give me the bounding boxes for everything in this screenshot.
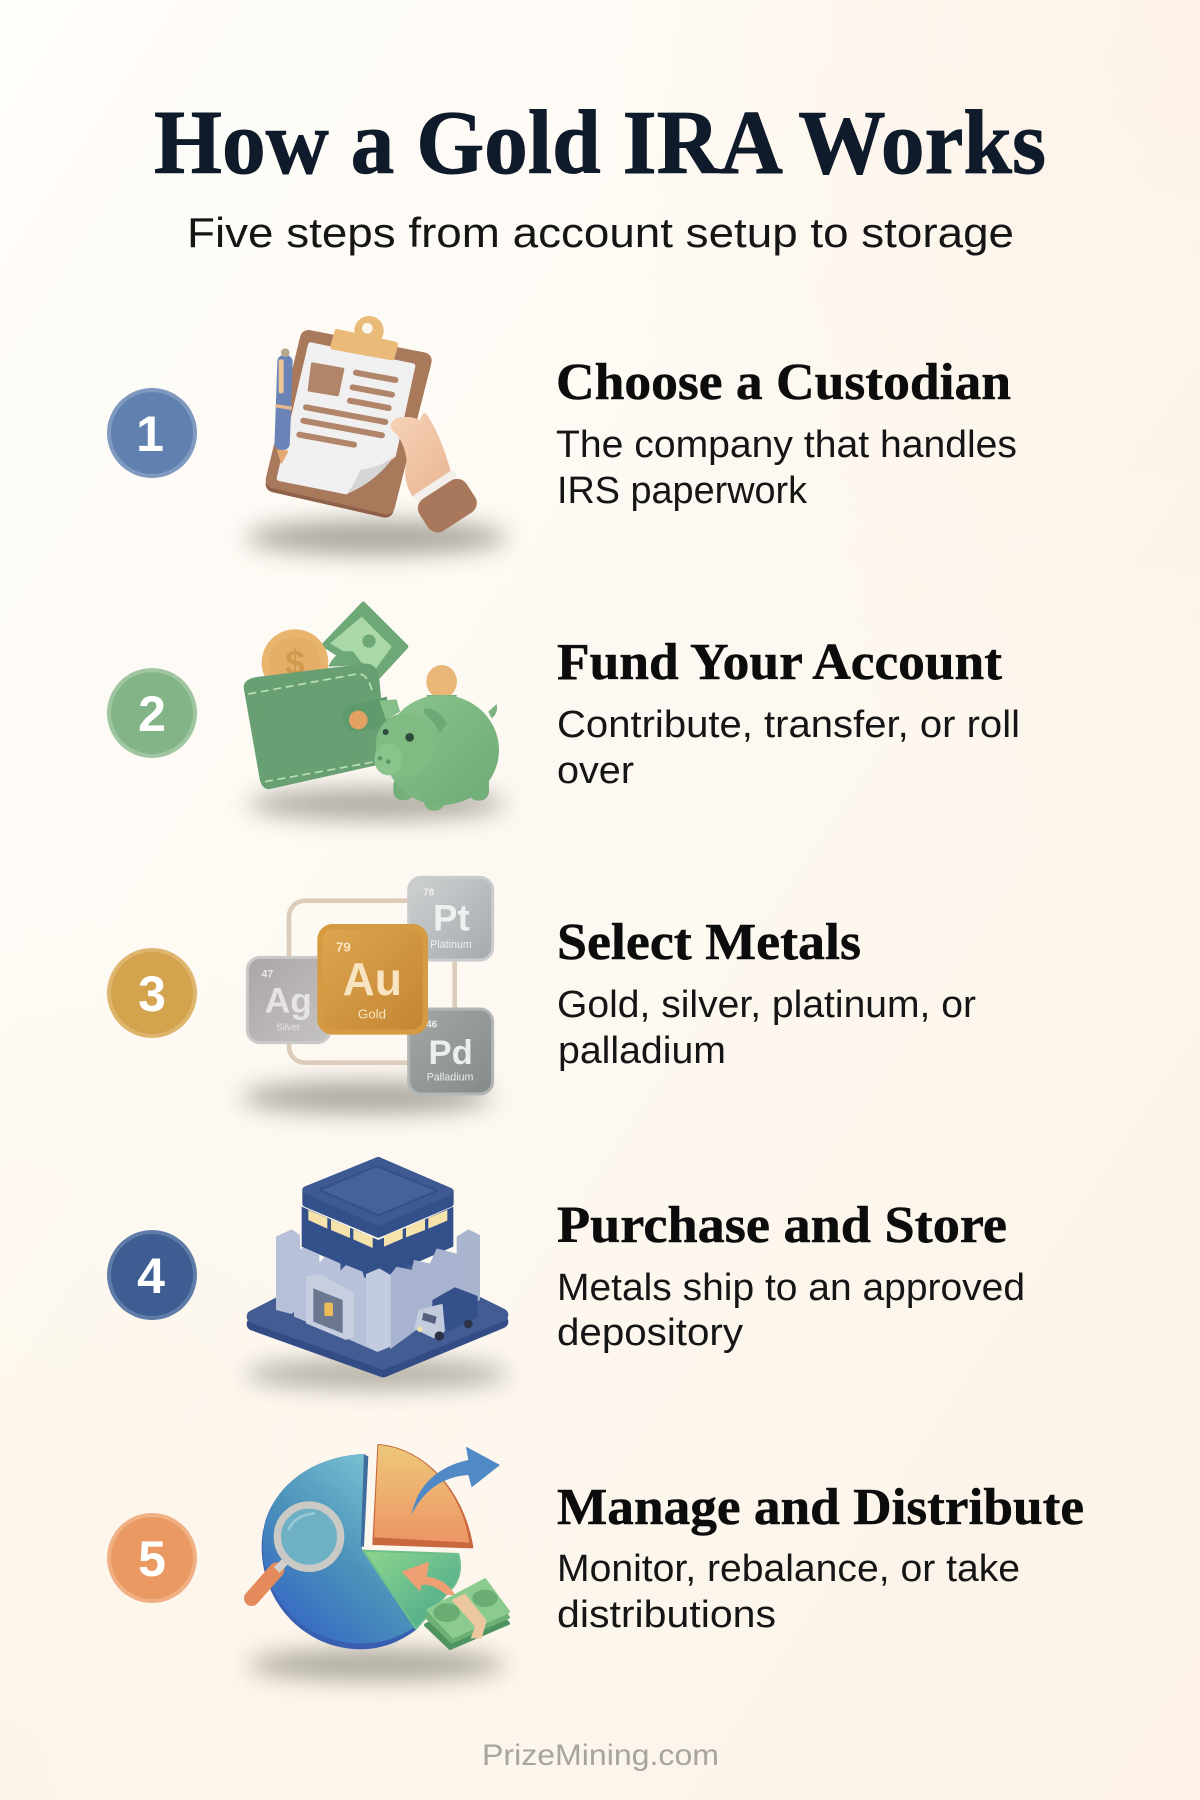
- icon: periodic table metal tiles: Pd: [429, 1034, 473, 1072]
- number badge 4: [107, 1230, 197, 1320]
- description 3: Gold, silver, platinum, or: [557, 984, 976, 1026]
- number badge 3: 3: [138, 966, 166, 1022]
- title: How a Gold IRA Works: [154, 92, 1046, 193]
- description 1: [556, 424, 1017, 512]
- description 5: distributions: [557, 1594, 776, 1636]
- subtitle: Five steps from account setup to storage: [187, 209, 1014, 256]
- icon: periodic table metal tiles: Ag: [265, 982, 312, 1021]
- heading 3: Select Metals: [557, 914, 861, 971]
- panel: step 1 choose a custodian: [107, 316, 1017, 555]
- icon: periodic table metal tiles: 46: [426, 1020, 438, 1031]
- icon: secure depository building with truck: [245, 1161, 508, 1389]
- description 1: The company that handles: [556, 424, 1017, 466]
- panel: step 2 fund your account: [107, 604, 1020, 820]
- icon: periodic table metal tiles: Platinum: [430, 939, 472, 951]
- number badge 2: [107, 668, 197, 758]
- icon: wallet, coin and piggy bank: [248, 604, 505, 820]
- number badge 4: 4: [137, 1248, 165, 1304]
- description 2: Contribute, transfer, or roll: [557, 704, 1020, 746]
- icon: periodic table metal tiles: Palladium: [427, 1072, 474, 1084]
- icon: periodic table metal tiles: Silver: [276, 1023, 301, 1034]
- description 4: depository: [557, 1312, 743, 1354]
- description 3: palladium: [558, 1030, 726, 1072]
- heading 4: Purchase and Store: [557, 1197, 1007, 1254]
- number badge 1: [107, 388, 197, 478]
- description 4: [557, 1267, 1025, 1354]
- icon: periodic table metal tiles: 47: [261, 968, 273, 980]
- icon: clipboard held in hand with pen: [247, 316, 507, 555]
- number badge 3: [107, 948, 197, 1038]
- panel: step 3 select metals: [107, 877, 976, 1113]
- heading 5: Manage and Distribute: [557, 1479, 1084, 1536]
- description 1: IRS paperwork: [557, 470, 808, 512]
- icon: periodic table metal tiles: [242, 877, 493, 1113]
- heading 2: Fund Your Account: [557, 634, 1003, 691]
- panel: step 4 purchase and store: [107, 1161, 1025, 1389]
- number badge 2: 2: [138, 686, 166, 742]
- description 4: Metals ship to an approved: [557, 1267, 1025, 1309]
- description 5: Monitor, rebalance, or take: [557, 1548, 1020, 1590]
- icon: periodic table metal tiles: Gold: [358, 1006, 386, 1021]
- icon: periodic table metal tiles: 79: [336, 939, 351, 954]
- panel: step 5 manage and distribute: [107, 1445, 1084, 1681]
- description 2: [557, 704, 1020, 792]
- icon: periodic table metal tiles: Au: [343, 953, 402, 1005]
- number badge 5: 5: [138, 1531, 166, 1587]
- icon: pie chart with magnifier, arrows and cash: [248, 1445, 508, 1681]
- heading 1: Choose a Custodian: [556, 354, 1011, 411]
- description 3: [557, 984, 976, 1072]
- icon: periodic table metal tiles: 78: [423, 887, 435, 898]
- icon: wallet, coin and piggy bank: $: [285, 644, 305, 683]
- number badge 5: [107, 1513, 197, 1603]
- description 5: [557, 1548, 1020, 1636]
- description 2: over: [557, 750, 634, 792]
- icon: periodic table metal tiles: Pt: [433, 898, 470, 939]
- number badge 1: 1: [136, 406, 164, 462]
- footer source credit: PrizeMining.com: [482, 1739, 719, 1772]
